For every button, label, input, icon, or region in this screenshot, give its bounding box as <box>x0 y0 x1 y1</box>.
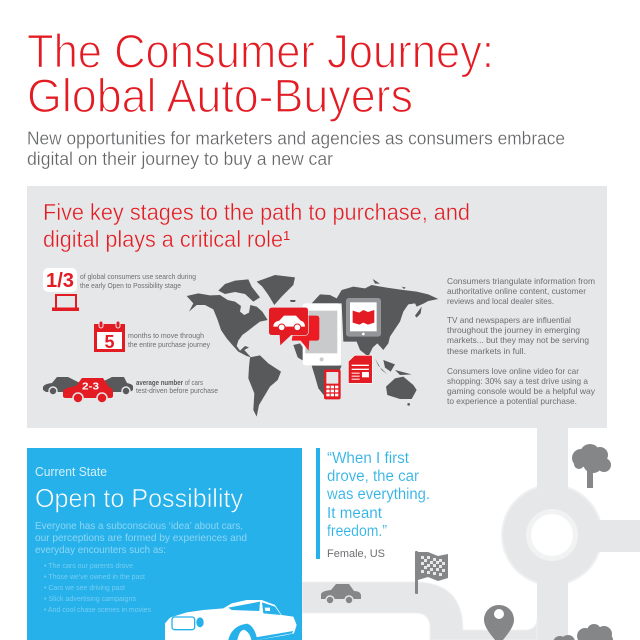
panel label: Current State <box>35 464 107 479</box>
bullet list: • Cars we see driving past <box>44 583 126 592</box>
icon: newspaper <box>348 355 372 383</box>
panel: five key stages <box>27 186 607 428</box>
text block: consumer insights: shopping: 30% say a test drive using a <box>447 376 588 386</box>
world map: Americas <box>187 275 304 417</box>
quote: freedom.” <box>327 523 387 540</box>
bullet list: • Those we’ve owned in the past <box>44 572 146 581</box>
stat: five months <box>94 321 210 352</box>
text block: consumer insights: throughout the journey in emerging <box>447 325 580 335</box>
icon: grey car on road <box>321 584 361 604</box>
stat: one third search: of global consumers use search during <box>80 272 196 281</box>
subtitle: New opportunities for marketers and agencies as consumers embrace <box>27 128 565 148</box>
stat: one third search <box>43 268 196 311</box>
panel body text: our perceptions are formed by experiences and <box>35 532 247 544</box>
quote: drove, the car <box>327 468 419 485</box>
text block: consumer insights: TV and newspapers are influential <box>447 315 571 325</box>
panel heading: Five key stages to the path to purchase, and <box>43 199 470 225</box>
text block: consumer insights: authoritative online content, customer <box>447 286 586 296</box>
quote: “When I first <box>327 450 410 467</box>
text block: consumer insights: gaming console would be a helpful way <box>447 386 596 396</box>
icon: location pin <box>484 605 514 640</box>
panel heading <box>43 199 470 252</box>
icon: trees bottom right <box>553 624 613 640</box>
panel body text: Everyone has a subconscious ‘idea’ about cars, <box>35 520 243 532</box>
icon: phone with screen <box>303 303 341 365</box>
bullet list: • Slick advertising campaigns <box>44 594 136 603</box>
icon: three cars <box>43 377 133 403</box>
icon: laptop <box>52 294 79 311</box>
text block: consumer insights: reviews and local dealer sites. <box>447 296 554 306</box>
text block: consumer insights: Consumers triangulate information from <box>447 276 595 286</box>
text block: consumer insights <box>447 276 596 406</box>
panel heading: Open to Possibility <box>35 483 243 513</box>
title: Global Auto-Buyers <box>27 69 413 122</box>
text block: consumer insights: markets... but they may not be serving <box>447 335 589 345</box>
icon: checkered flag <box>415 551 448 594</box>
quote attribution: Female, US <box>327 548 385 560</box>
stat: one third search: 1/3 <box>46 270 74 292</box>
icon: three cars: 2-3 <box>82 380 99 392</box>
panel heading: 1 <box>283 228 290 243</box>
stat: cars test-driven <box>43 377 218 403</box>
panel: open to possibility <box>27 448 302 640</box>
stat: five months: months to move through <box>128 331 204 340</box>
subtitle: digital on their journey to buy a new car <box>27 149 333 169</box>
text block: consumer insights: Consumers love online video for car <box>447 366 579 376</box>
panel body text <box>35 520 247 556</box>
panel heading: digital plays a critical role <box>43 226 283 252</box>
quote: It meant <box>327 505 383 522</box>
bullet list: • And cool chase scenes in movies <box>44 605 151 614</box>
icon: calendar: 5 <box>104 332 115 352</box>
quote: was everything. <box>326 486 430 503</box>
icon: tree top right <box>572 444 611 488</box>
stat: cars test-driven: average number of cars <box>136 378 203 387</box>
quote <box>316 448 430 560</box>
icon: tablet with map <box>346 298 381 337</box>
stat: five months: the entire purchase journey <box>128 340 210 349</box>
icon: white classic car <box>165 600 297 640</box>
icon: chat bubbles with car <box>269 307 319 351</box>
bullet list: • The cars our parents drove <box>44 561 133 570</box>
icon: mobile phone <box>324 369 341 399</box>
panel body text: everyday encounters such as: <box>35 544 166 556</box>
title: The Consumer Journey: <box>27 24 494 78</box>
subtitle <box>27 128 565 169</box>
road network <box>302 428 640 640</box>
stat: one third search: the early Open to Possibility stage <box>80 281 181 290</box>
title <box>27 24 494 122</box>
stat: cars test-driven: test-driven before purchase <box>136 386 218 395</box>
world map: Eurasia, Africa and Australia <box>312 279 438 406</box>
text block: consumer insights: these markets in full. <box>447 346 526 356</box>
bullet list <box>44 561 151 614</box>
text block: consumer insights: to experience a potential purchase. <box>447 396 577 406</box>
